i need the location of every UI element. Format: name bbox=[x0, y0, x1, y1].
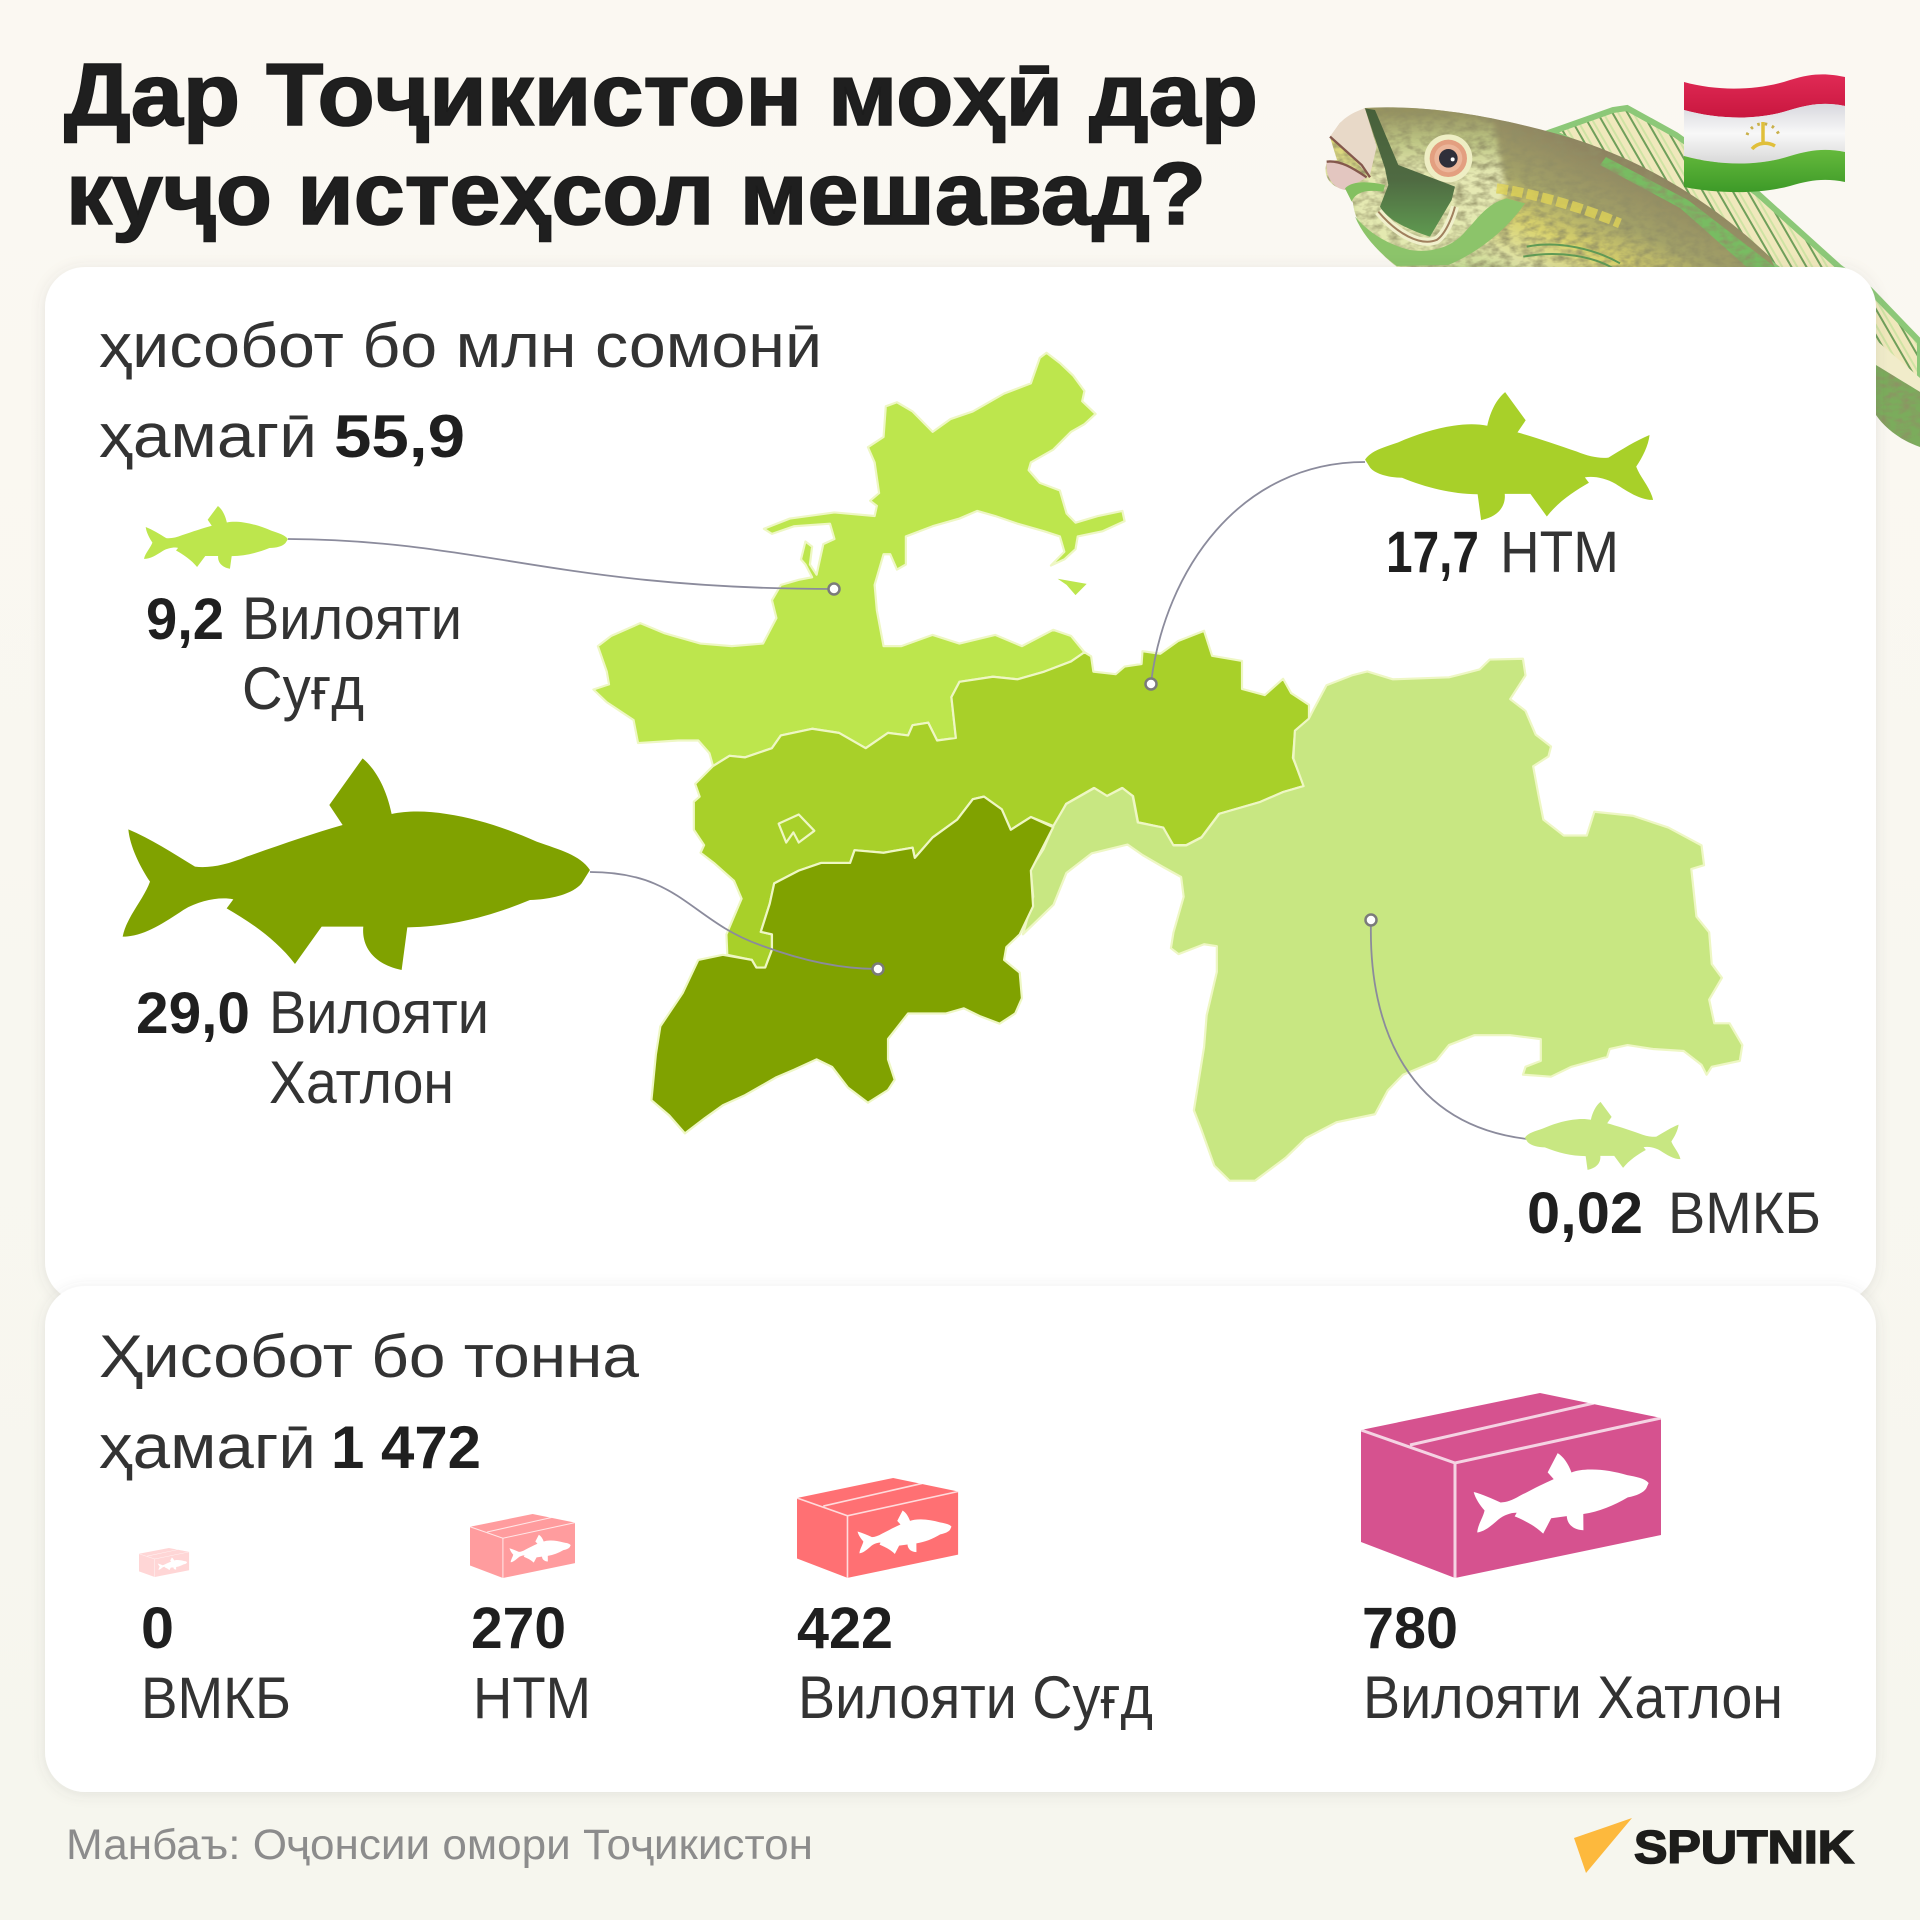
label: NTM 17,7: 17,7 bbox=[1386, 520, 1479, 585]
item: Sughd 422: Вилояти Суғд bbox=[798, 1664, 1153, 1731]
item: Sughd 422 bbox=[797, 1596, 1153, 1731]
heading: tonnes: Ҳисобот бо тонна bbox=[99, 1323, 640, 1390]
leader line: NTM bbox=[1146, 462, 1365, 690]
total: 1 472: 1 472 bbox=[331, 1414, 481, 1481]
logo: Sputnik bbox=[1574, 1818, 1854, 1873]
illustration: green fish behind panel bbox=[1326, 107, 1920, 447]
icon: fish NTM bbox=[1365, 392, 1653, 520]
label: NTM 17,7: НТМ bbox=[1500, 520, 1619, 585]
region: GBAO bbox=[1023, 659, 1742, 1181]
region: NTM bbox=[694, 631, 1309, 968]
total: 1 472: ҳамагӣ bbox=[99, 1413, 316, 1482]
icon: box Khatlon bbox=[1361, 1393, 1661, 1578]
item: GBAO 0: 0 bbox=[141, 1596, 174, 1661]
region: Khatlon bbox=[651, 797, 1053, 1133]
item: Sughd 422: 422 bbox=[797, 1596, 893, 1661]
label: Sughd 9,2 bbox=[146, 585, 462, 722]
item: Khatlon 780: 780 bbox=[1362, 1596, 1458, 1661]
region: Sughd bbox=[593, 353, 1125, 766]
label: GBAO 0,02 bbox=[1527, 1181, 1821, 1246]
item: GBAO 0 bbox=[141, 1596, 291, 1731]
item: Khatlon 780 bbox=[1362, 1596, 1783, 1731]
icon: box GBAO bbox=[139, 1548, 189, 1577]
item: NTM 270: НТМ bbox=[473, 1666, 591, 1731]
label: Sughd 9,2: Суғд bbox=[242, 655, 364, 722]
icon: box NTM bbox=[470, 1514, 575, 1578]
panel: report in million somoni bbox=[45, 267, 1876, 1302]
label: Khatlon 29,0 bbox=[136, 979, 489, 1116]
label: GBAO 0,02: 0,02 bbox=[1527, 1181, 1643, 1246]
total: 55,9 bbox=[99, 402, 465, 471]
title: куҷо истеҳсол мешавад? bbox=[66, 144, 1206, 243]
total: 55,9: ҳамагӣ bbox=[99, 402, 317, 471]
icon: fish Khatlon bbox=[123, 758, 590, 970]
icon: fish GBAO bbox=[1525, 1102, 1680, 1170]
label: Sughd 9,2: 9,2 bbox=[146, 587, 224, 652]
logo: Sputnik: SPUTNIK bbox=[1634, 1821, 1854, 1873]
leader line: Khatlon bbox=[590, 872, 884, 974]
label: NTM 17,7 bbox=[1386, 520, 1619, 585]
leader line: GBAO bbox=[1366, 914, 1527, 1139]
panel: report in tonnes bbox=[45, 1286, 1876, 1792]
map of Tajikistan bbox=[593, 353, 1742, 1181]
label: GBAO 0,02: ВМКБ bbox=[1668, 1181, 1821, 1246]
source: Манбаъ: Оҷонсии омори Тоҷикистон bbox=[66, 1821, 813, 1869]
total: 1 472 bbox=[99, 1413, 481, 1482]
label: Khatlon 29,0: 29,0 bbox=[136, 981, 250, 1046]
title bbox=[64, 45, 1258, 243]
item: Khatlon 780: Вилояти Хатлон bbox=[1363, 1664, 1783, 1731]
item: GBAO 0: ВМКБ bbox=[141, 1666, 291, 1731]
total: 55,9: 55,9 bbox=[334, 403, 465, 470]
label: Sughd 9,2: Вилояти bbox=[242, 585, 462, 652]
label: Khatlon 29,0: Вилояти bbox=[269, 979, 489, 1046]
label: Khatlon 29,0: Хатлон bbox=[269, 1049, 454, 1116]
leader line: Sughd bbox=[288, 539, 840, 594]
icon: Tajikistan flag bbox=[1684, 74, 1845, 192]
title: Дар Тоҷикистон моҳӣ дар bbox=[64, 45, 1258, 144]
icon: fish Sughd bbox=[144, 506, 288, 569]
heading: million somoni: ҳисобот бо млн сомонӣ bbox=[99, 312, 822, 381]
icon: box Sughd bbox=[797, 1478, 958, 1578]
item: NTM 270 bbox=[471, 1596, 591, 1731]
item: NTM 270: 270 bbox=[471, 1596, 566, 1661]
